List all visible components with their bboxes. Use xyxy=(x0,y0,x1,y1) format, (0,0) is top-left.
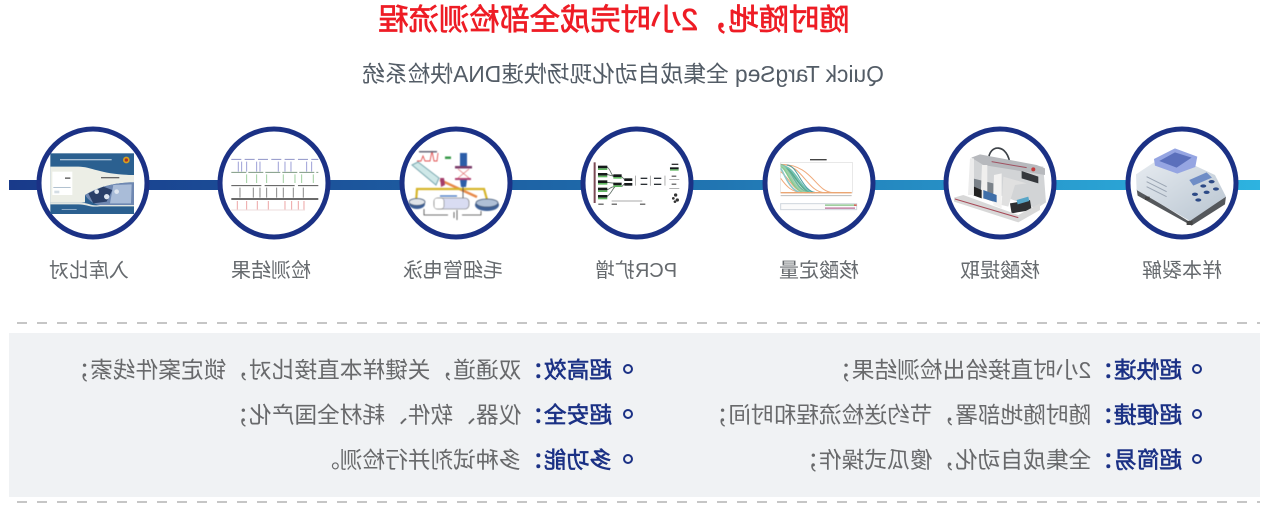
feature: ultra safe: 超安全：仪器、软件、耗材全国产化； xyxy=(226,402,612,428)
step circle: nucleic acid quantification curves xyxy=(765,129,873,237)
step label: results: 检测结果 xyxy=(231,260,311,282)
panel: feature background xyxy=(9,333,1260,497)
feature: ultra fast: 超快速：2小时直接给出检测结果； xyxy=(829,357,1182,383)
step label: quantification: 核酸定量 xyxy=(779,260,859,282)
step label: sample lysis: 样本裂解 xyxy=(1142,260,1222,282)
feature: ultra simple: 超简易：全集成自动化，傻瓜式操作； xyxy=(796,447,1182,473)
subtitle: Quick TargSeq 全集成自动化现场快速DNA快检系统 xyxy=(362,61,884,87)
step circle: detection result electropherogram xyxy=(220,129,328,237)
feature: ultra efficient: 超高效：双通道，关键样本直接比对，锁定案件线索； xyxy=(68,357,612,383)
step label: capillary electrophoresis: 毛细管电泳 xyxy=(403,260,503,282)
top dashed divider xyxy=(17,322,1260,324)
bottom dashed divider xyxy=(17,501,1260,503)
step circle: database comparison screenshot xyxy=(39,129,147,237)
step circle: sample lysis instrument xyxy=(1128,129,1236,237)
bullets xyxy=(624,365,1201,463)
step circle: PCR amplification diagram xyxy=(583,129,691,237)
feature: multifunction: 多功能：多种试剂并行检测。 xyxy=(317,447,612,473)
step circle: nucleic acid extraction robot xyxy=(946,129,1054,237)
step label: extraction: 核酸提取 xyxy=(960,260,1040,282)
step circle: capillary electrophoresis schematic xyxy=(402,129,510,237)
feature: ultra convenient: 超便捷：随时随地部署，节约送检流程和时间； xyxy=(706,402,1182,428)
step label: database comparison: 入库比对 xyxy=(49,260,129,282)
process timeline bar xyxy=(9,180,1260,190)
step label: PCR: PCR扩增 xyxy=(595,260,677,282)
title: 随时随地，2小时完成全部检测流程 xyxy=(378,4,850,37)
